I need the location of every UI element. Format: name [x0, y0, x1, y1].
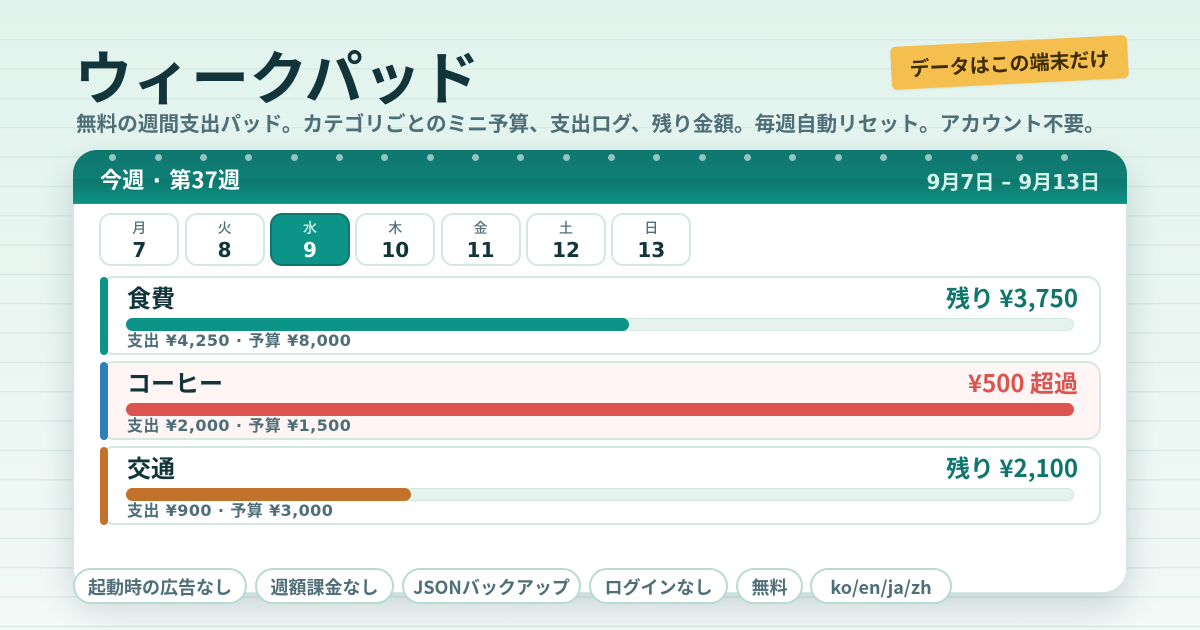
- badge: data on this device only: データはこの端末だけ: [908, 43, 1110, 82]
- food spend text: 支出 ¥4,250 · 予算 ¥8,000: [127, 331, 351, 350]
- day tab: Tuesday: 火: [218, 221, 232, 237]
- food bar fill: [126, 318, 629, 331]
- panel: weekly pad card: [73, 150, 1127, 593]
- chip: free: 無料: [752, 574, 788, 600]
- food name: 食費: [127, 285, 175, 313]
- transport spend text: 支出 ¥900 · 予算 ¥3,000: [127, 501, 333, 520]
- budget row: food: [100, 276, 1101, 355]
- coffee name: コーヒー: [127, 370, 223, 398]
- chip: no weekly billing: 週額課金なし: [270, 574, 378, 600]
- budget row: transport: [100, 446, 1101, 525]
- day tab: Tuesday: 8: [218, 238, 232, 262]
- transport bar fill: [126, 488, 411, 501]
- chip: no launch ads: 起動時の広告なし: [88, 574, 232, 600]
- day tab: Thursday: 10: [381, 238, 409, 262]
- day tab: Thursday: 木: [388, 221, 402, 237]
- chip: no weekly billing: [255, 568, 394, 604]
- day tab: Friday: 11: [467, 238, 495, 262]
- panel header band with binding holes: [73, 150, 1127, 204]
- date range: 9月7日 – 9月13日: [926, 170, 1100, 194]
- chip: JSON backup: [402, 568, 581, 604]
- food bar track: [126, 318, 1074, 331]
- badge: data on this device only: [890, 35, 1128, 90]
- chip: no login: ログインなし: [604, 574, 712, 600]
- chip: free: [736, 568, 803, 604]
- chip: languages: [810, 568, 952, 604]
- coffee spend text: 支出 ¥2,000 · 予算 ¥1,500: [127, 416, 351, 435]
- day tab: Wednesday, selected: [270, 213, 350, 266]
- chip: no login: [589, 568, 728, 604]
- day tab: Sunday: 13: [637, 238, 665, 262]
- day tab: Friday: [441, 213, 521, 266]
- subtitle: 無料の週間支出パッド。カテゴリごとのミニ予算、支出ログ、残り金額。毎週自動リセット。アカウント不要。: [76, 107, 1105, 137]
- day tab: Sunday: [611, 213, 691, 266]
- day tab: Saturday: 12: [552, 238, 580, 262]
- transport remaining: 残り ¥2,100: [946, 449, 1078, 484]
- coffee over amount: ¥500 超過: [968, 364, 1078, 399]
- week label: 今週 · 第37週: [100, 163, 240, 195]
- day tab: Monday: 月: [132, 221, 146, 237]
- day tab: Saturday: 土: [559, 221, 573, 237]
- title: ウィークパッド: [74, 32, 480, 116]
- chip: languages: ko/en/ja/zh: [830, 574, 932, 600]
- coffee bar fill: [126, 403, 1074, 416]
- day tab: Friday: 金: [474, 221, 488, 237]
- chip: JSON backup: JSONバックアップ: [413, 574, 570, 600]
- day tab: Wednesday, selected: 9: [303, 238, 317, 262]
- transport bar track: [126, 488, 1074, 501]
- day tab: Sunday: 日: [644, 221, 658, 237]
- day tab: Wednesday, selected: 水: [303, 221, 317, 237]
- chip: no launch ads: [73, 568, 247, 604]
- day tab: Monday: [99, 213, 179, 266]
- coffee colour tab: [100, 362, 108, 440]
- day tab: Thursday: [355, 213, 435, 266]
- day tab: Monday: 7: [132, 238, 146, 262]
- transport name: 交通: [127, 455, 175, 483]
- budget row: coffee, over budget: [100, 361, 1101, 440]
- food colour tab: [100, 277, 108, 355]
- transport colour tab: [100, 447, 108, 525]
- food remaining: 残り ¥3,750: [946, 279, 1078, 314]
- day tab: Saturday: [526, 213, 606, 266]
- day tab: Tuesday: [185, 213, 265, 266]
